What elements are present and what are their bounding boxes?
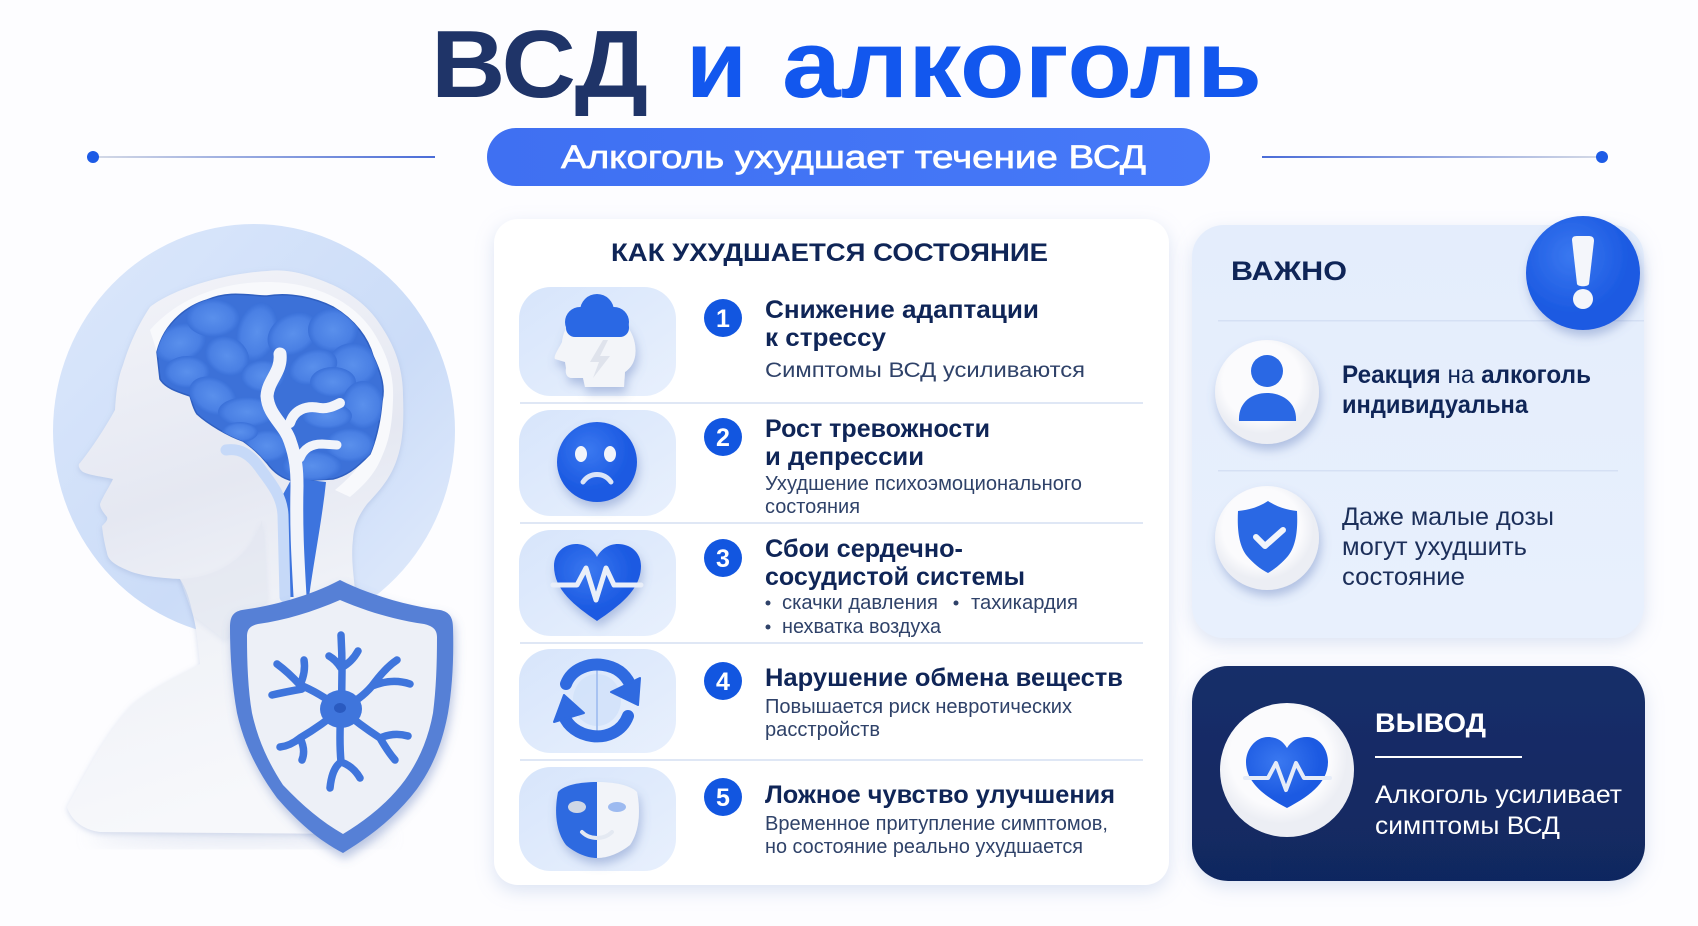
heading: conclusion: ВЫВОД: [1375, 708, 1486, 738]
number badge 2: [704, 418, 742, 456]
illustration: head with brain and shield: [53, 224, 455, 853]
text: conclusion: симптомы ВСД: [1375, 812, 1560, 840]
text: small doses: [1342, 503, 1554, 591]
text: small doses: Даже малые дозы: [1342, 503, 1554, 531]
row 3 text: Сбои сердечно-: [765, 535, 963, 563]
halo circle: [53, 224, 455, 638]
icon: head with storm cloud: [519, 287, 676, 396]
row 3 text: [765, 535, 1078, 638]
icon: heart with pulse: [1220, 703, 1354, 837]
row 4: metabolism disorder: [519, 649, 1123, 753]
row 5 text: Временное притупление симптомов,: [765, 813, 1108, 835]
row 2 text: Рост тревожности: [765, 415, 990, 443]
number badge 4: 4: [716, 668, 730, 696]
row 5 text: но состояние реально ухудшается: [765, 836, 1083, 858]
brain: [148, 294, 384, 481]
panel: how the condition worsens: [494, 219, 1169, 885]
number badge 4: [704, 662, 742, 700]
shield: [230, 580, 453, 853]
subtitle pill: Алкоголь ухудшает течение ВСД: [561, 139, 1146, 175]
row dividers: [520, 402, 1143, 761]
panel heading: КАК УХУДШАЕТСЯ СОСТОЯНИЕ: [611, 239, 1048, 267]
row 5: false improvement: [519, 767, 1115, 871]
row 4 text: расстройств: [765, 719, 880, 741]
number badge 2: 2: [716, 424, 730, 452]
right decorative line with dot: [1262, 151, 1608, 163]
text: conclusion: [1375, 781, 1623, 840]
text: small doses: могут ухудшить: [1342, 533, 1527, 561]
bust shadow: [90, 831, 390, 845]
bright head band around brain: [150, 282, 393, 497]
nerves: [226, 354, 340, 597]
icon: person: [1215, 340, 1319, 444]
icon: exclamation mark: [1526, 216, 1640, 330]
head silhouette: [67, 270, 403, 834]
row 1: stress adaptation: [519, 287, 1085, 396]
number badge 5: 5: [716, 784, 730, 812]
title: алкоголь: [782, 11, 1262, 118]
row 4 text: [765, 664, 1123, 741]
neuron icon: [272, 635, 410, 788]
number badge 5: [704, 778, 742, 816]
heading: important: ВАЖНО: [1231, 256, 1347, 286]
neck shading: [180, 520, 268, 640]
title: ВСД: [431, 11, 648, 118]
row 3 text: тахикардия: [971, 592, 1078, 614]
row 3 text: сосудистой системы: [765, 563, 1025, 591]
row 1 text: Симптомы ВСД усиливаются: [765, 359, 1085, 382]
panel: conclusion: [1192, 666, 1645, 881]
icon: heart with pulse: [519, 530, 676, 636]
row 2 text: и депрессии: [765, 443, 924, 471]
number badge 1: 1: [716, 305, 730, 333]
text: individual reaction: [1342, 361, 1591, 419]
title: и: [686, 11, 747, 118]
left decorative line with dot: [87, 151, 435, 163]
text: small doses: состояние: [1342, 563, 1465, 591]
row 2 text: Ухудшение психоэмоционального: [765, 473, 1082, 495]
row 3 text: скачки давления: [782, 592, 938, 614]
panel: important: [1192, 216, 1644, 638]
row 5 text: Ложное чувство улучшения: [765, 781, 1115, 809]
row 3 text: нехватка воздуха: [782, 616, 942, 638]
row 1 text: к стрессу: [765, 324, 886, 352]
icon: shield with check: [1215, 486, 1319, 590]
subtitle pill: [487, 128, 1210, 186]
icon: sad face: [519, 410, 676, 516]
row 4 text: Нарушение обмена веществ: [765, 664, 1123, 692]
icon: circular arrows: [519, 649, 676, 753]
row 5 text: [765, 781, 1115, 858]
row 3: cardiovascular failures: [519, 530, 1078, 638]
number badge 3: [704, 539, 742, 577]
number badge 3: 3: [716, 545, 730, 573]
text: individual reaction: индивидуальна: [1342, 391, 1529, 419]
title: [431, 11, 1262, 118]
row 1 text: [765, 296, 1085, 382]
text: individual reaction: Реакция на алкоголь: [1342, 361, 1591, 389]
row 2: anxiety and depression: [519, 410, 1082, 518]
row 1 text: Снижение адаптации: [765, 296, 1039, 324]
row 4 text: Повышается риск невротических: [765, 696, 1072, 718]
text: conclusion: Алкоголь усиливает: [1375, 781, 1623, 809]
number badge 1: [704, 299, 742, 337]
row 2 text: [765, 415, 1082, 518]
row 2 text: состояния: [765, 496, 860, 518]
icon: half mask: [519, 767, 676, 871]
